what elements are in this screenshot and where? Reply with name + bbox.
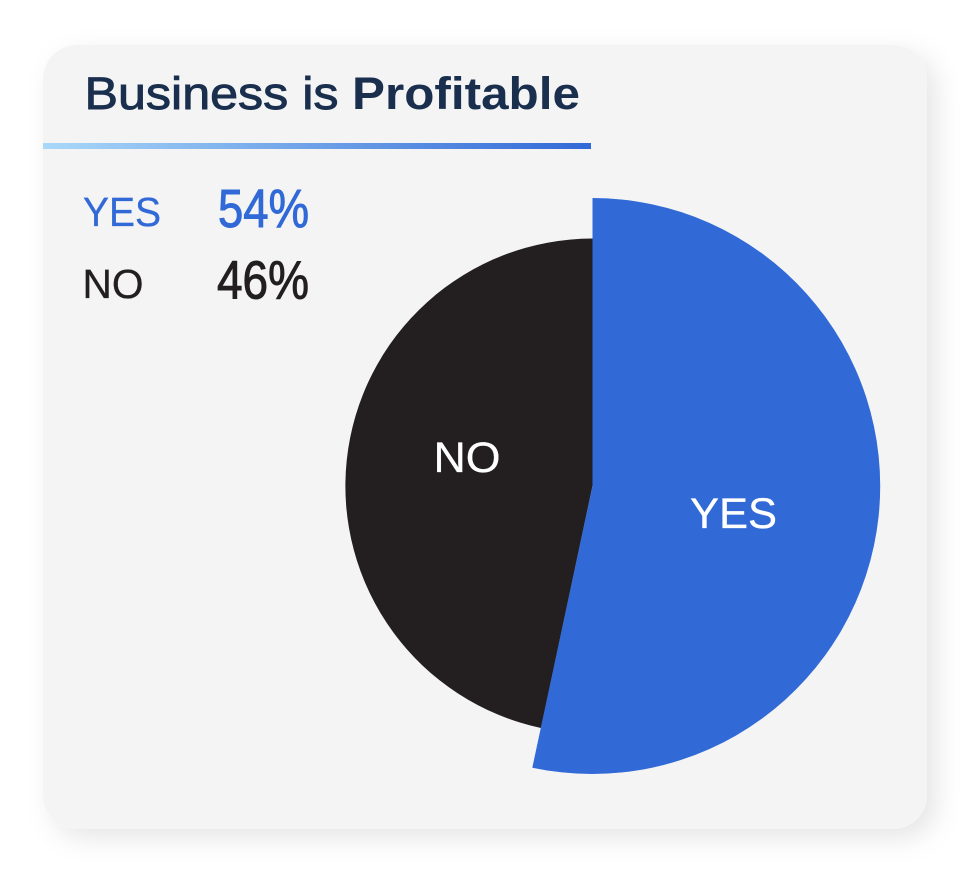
legend: no xyxy=(82,250,309,310)
title xyxy=(84,68,580,119)
pie chart xyxy=(345,198,880,774)
pie label: no: NO xyxy=(434,434,500,482)
pie slice: yes xyxy=(532,198,880,774)
pie label: yes: YES xyxy=(690,490,777,538)
legend: no: 46% xyxy=(217,250,309,310)
legend: yes: 54% xyxy=(218,179,309,239)
legend: yes xyxy=(83,179,309,239)
title underline xyxy=(43,143,591,149)
legend: no: NO xyxy=(82,261,144,307)
legend: yes: YES xyxy=(83,189,161,235)
title: Business is xyxy=(84,68,338,119)
title: Profitable xyxy=(352,68,580,119)
pie slice: no xyxy=(345,238,592,728)
